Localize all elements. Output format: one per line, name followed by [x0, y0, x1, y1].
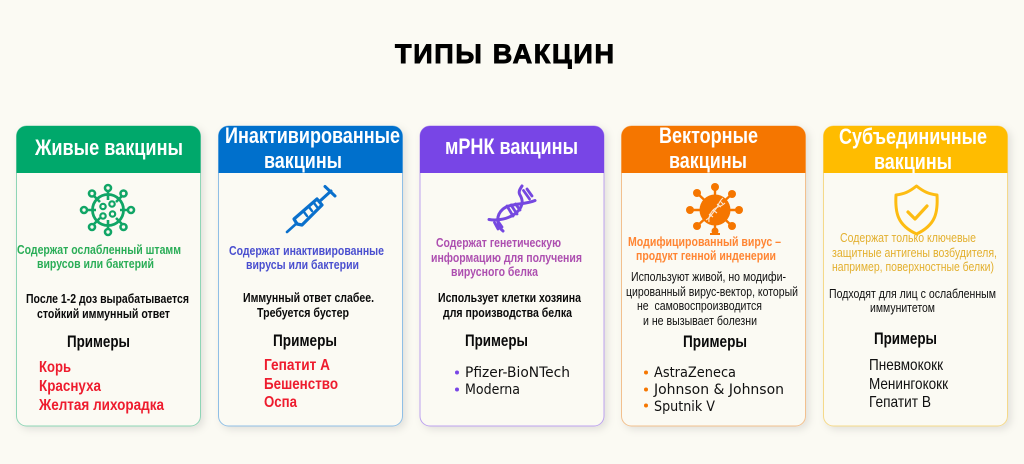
examples list: Гепатит А — [264, 357, 330, 374]
description: inactivated vaccines: вирусы или бактерии — [246, 257, 359, 272]
examples list: Пневмококк — [869, 357, 944, 374]
description: mRNA vaccines: информацию для получения — [431, 250, 582, 265]
description: mRNA vaccines: Содержат генетическую — [436, 235, 561, 250]
header: mRNA vaccines — [420, 126, 604, 173]
note: subunit vaccines: иммунитетом — [870, 300, 935, 315]
header: mRNA vaccines: мРНК вакцины — [445, 134, 578, 159]
examples heading: Примеры — [874, 329, 937, 348]
description: live vaccines: вирусов или бактерий — [37, 256, 154, 271]
note: inactivated vaccines: Требуется бустер — [257, 305, 349, 320]
icon: virus outline — [81, 185, 134, 235]
header: subunit vaccines — [824, 124, 1008, 174]
examples list: AstraZeneca — [654, 365, 736, 381]
examples list: Moderna — [465, 382, 520, 398]
examples heading: Примеры — [67, 332, 130, 351]
note: vector vaccines: Используют живой, но модифи- — [631, 269, 786, 284]
examples list: Оспа — [264, 394, 297, 411]
description: live vaccines — [17, 242, 181, 271]
description: mRNA vaccines: вирусного белка — [451, 264, 539, 279]
examples list: Sputnik V — [654, 399, 715, 415]
examples list: Бешенство — [264, 376, 338, 393]
note: vector vaccines — [626, 269, 798, 328]
panel: vector vaccines — [622, 123, 806, 426]
description: inactivated vaccines: Содержат инактивированные — [229, 243, 384, 258]
examples list: Желтая лихорадка — [38, 397, 164, 414]
description: live vaccines: Содержат ослабленный штамм — [17, 242, 181, 257]
examples heading: Примеры — [683, 332, 747, 351]
examples list: Менингококк — [869, 376, 949, 393]
description: inactivated vaccines — [229, 243, 384, 272]
examples list — [644, 365, 784, 415]
examples heading: Примеры — [465, 331, 528, 350]
icon: syringe — [287, 186, 335, 232]
icon: shield with check — [896, 186, 937, 234]
examples list: Корь — [39, 359, 71, 376]
header: vector vaccines: вакцины — [669, 148, 747, 173]
note: vector vaccines: цированный вирус-вектор, который — [626, 284, 798, 299]
description: subunit vaccines: Содержат только ключевые — [840, 230, 976, 245]
description: vector vaccines — [628, 234, 781, 263]
note: live vaccines — [26, 291, 189, 321]
title: ТИПЫ ВАКЦИН — [395, 39, 614, 69]
examples list: Pfizer-BioNTech — [465, 365, 570, 381]
header: live vaccines: Живые вакцины — [34, 135, 183, 160]
header: vector vaccines — [622, 123, 806, 173]
description: subunit vaccines — [832, 230, 997, 274]
description: vector vaccines: продукт генной инденерии — [636, 248, 776, 263]
note: subunit vaccines — [829, 286, 996, 315]
panel: subunit vaccines — [824, 124, 1008, 426]
header: inactivated vaccines — [218, 123, 402, 173]
examples list — [869, 357, 949, 411]
note: mRNA vaccines: для производства белка — [443, 305, 573, 320]
description: vector vaccines: Модифицированный вирус – — [628, 234, 781, 249]
examples list — [38, 359, 164, 414]
header: subunit vaccines: Субъединичные — [839, 124, 987, 149]
note: vector vaccines: и не вызывает болезни — [643, 313, 757, 328]
examples list — [455, 365, 570, 398]
header: inactivated vaccines: Инактивированные — [225, 123, 400, 148]
examples list — [264, 357, 338, 411]
header: inactivated vaccines: вакцины — [264, 148, 342, 173]
header: live vaccines — [16, 126, 201, 173]
examples list: Краснуха — [39, 378, 101, 395]
note: live vaccines: стойкий иммунный ответ — [37, 306, 170, 321]
icon: DNA helix — [489, 186, 535, 231]
panel: inactivated vaccines — [218, 123, 402, 426]
note: inactivated vaccines — [243, 290, 374, 320]
note: mRNA vaccines: Использует клетки хозяина — [438, 290, 582, 305]
note: mRNA vaccines — [438, 290, 582, 320]
note: inactivated vaccines: Иммунный ответ слабее. — [243, 290, 374, 305]
icon: virus with DNA — [686, 183, 743, 235]
description: mRNA vaccines — [431, 235, 582, 279]
examples heading: Примеры — [273, 331, 337, 350]
panel: live vaccines — [16, 126, 201, 426]
note: vector vaccines: не самовоспроизводится — [637, 298, 762, 313]
note: live vaccines: После 1-2 доз вырабатывается — [26, 291, 189, 306]
panel: mRNA vaccines — [420, 126, 604, 426]
header: subunit vaccines: вакцины — [874, 149, 952, 174]
examples list: Johnson & Johnson — [653, 382, 784, 398]
examples list: Гепатит В — [869, 394, 931, 411]
header: vector vaccines: Векторные — [659, 123, 758, 148]
